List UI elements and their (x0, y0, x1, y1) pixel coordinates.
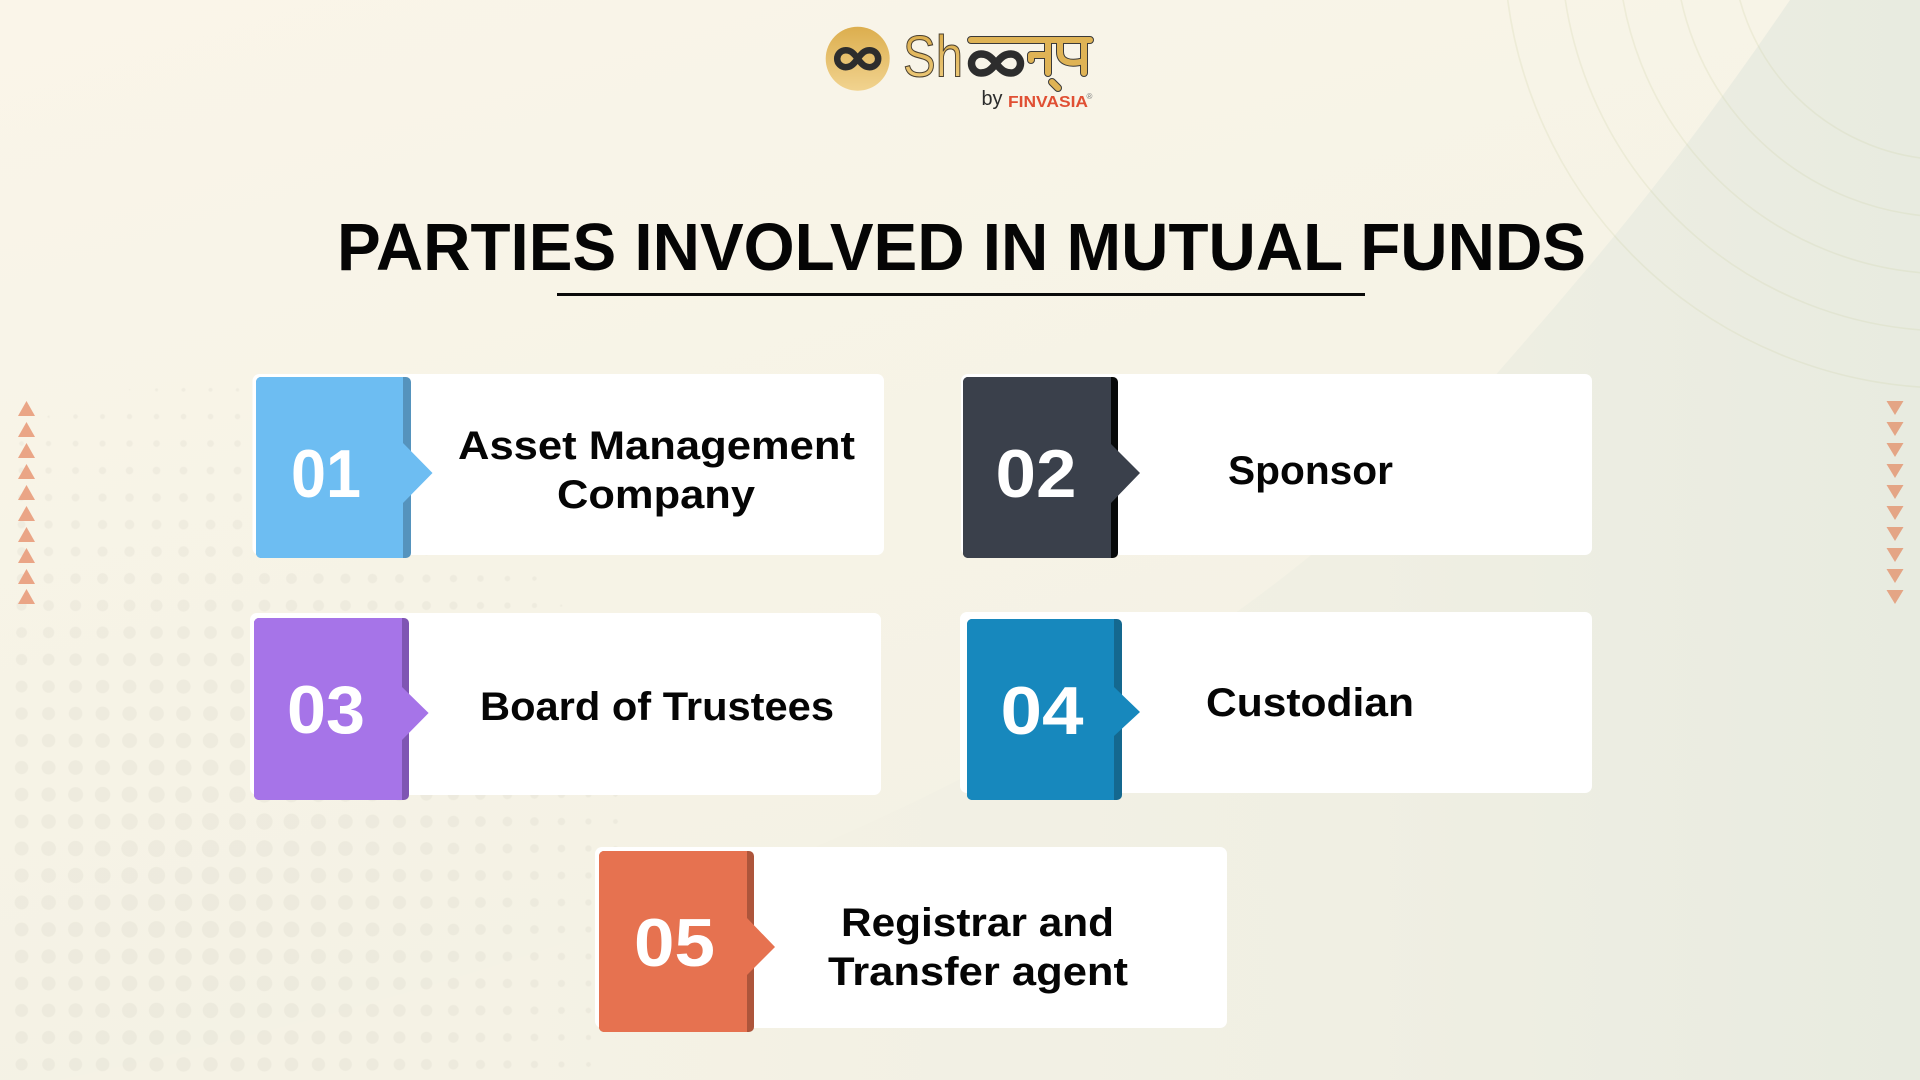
number box 04 (967, 619, 1140, 800)
title: PARTIES INVOLVED IN MUTUAL FUNDS (337, 210, 1586, 285)
halftone dot pattern (8, 376, 656, 1078)
label: Company (557, 473, 756, 517)
number box 01 (256, 377, 432, 558)
number 02: 02 (996, 436, 1076, 512)
panel: 05 Registrar and Transfer agent (595, 847, 1227, 1032)
label: Asset Management (458, 424, 855, 468)
logo Finvasia: FINVASIA (1008, 94, 1088, 111)
title underline (557, 293, 1365, 296)
number 05: 05 (634, 905, 715, 981)
number 01: 01 (291, 436, 361, 512)
number box 05 (599, 851, 775, 1032)
label: Registrar and (841, 901, 1114, 945)
icon: wordmark top bar and letterforms (971, 40, 1090, 88)
label: Transfer agent (828, 950, 1128, 994)
label: Sponsor (1228, 449, 1393, 493)
right triangles (1886, 401, 1904, 604)
panel: 03 Board of Trustees (250, 613, 881, 800)
label: Custodian (1206, 681, 1414, 725)
label: Board of Trustees (480, 685, 834, 729)
icon: gold circle with infinity (826, 27, 890, 91)
label (458, 424, 855, 517)
label (828, 901, 1128, 994)
logo byline: by (982, 88, 1002, 110)
logo: Shoonya by Finvasia (826, 24, 1092, 111)
panel: 02 Sponsor (961, 374, 1592, 558)
number 03: 03 (287, 672, 365, 748)
panel: 01 Asset Management Company (252, 374, 884, 558)
logo registered mark: ® (1086, 92, 1092, 101)
logo wordmark Sh: Sh (903, 24, 963, 90)
number box 02 (963, 377, 1140, 558)
icon: wordmark infinity (972, 54, 1020, 73)
left triangles (18, 401, 35, 604)
number box 03 (254, 618, 429, 800)
panel: 04 Custodian (960, 612, 1592, 800)
number 04: 04 (1000, 673, 1084, 749)
